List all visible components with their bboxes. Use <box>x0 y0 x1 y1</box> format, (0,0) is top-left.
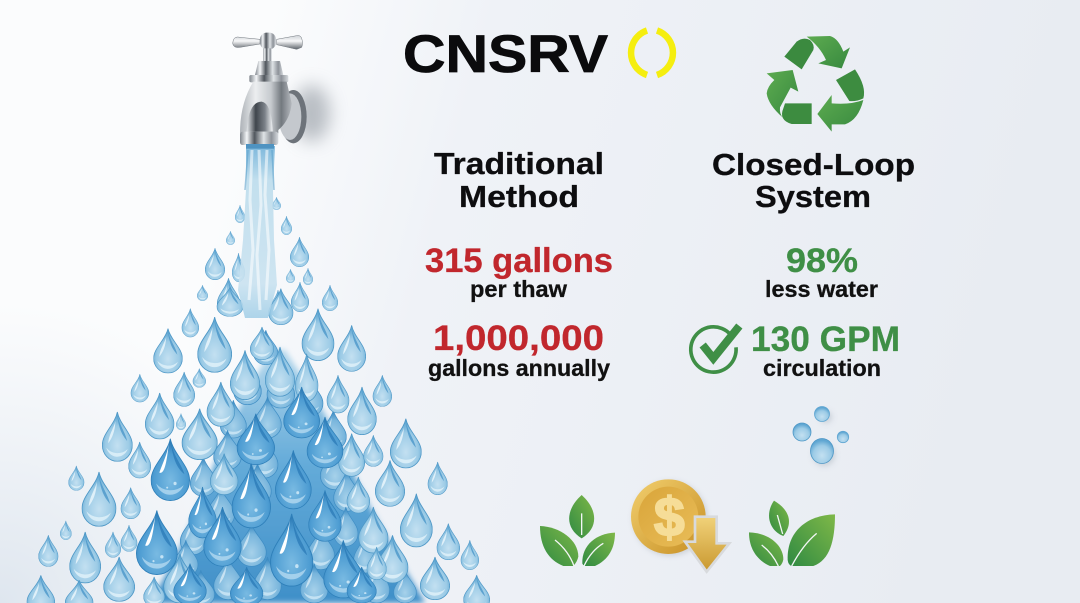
cross handle <box>233 36 302 49</box>
faucet <box>233 33 330 149</box>
icon: check mark <box>691 326 739 372</box>
upper falling drops <box>197 197 338 318</box>
faucet shadow <box>293 85 330 142</box>
icon: coin with down arrow <box>631 479 729 572</box>
icon: recycle <box>767 36 864 132</box>
heading: Closed-Loop System <box>712 147 915 214</box>
stat: 315 gallons per thaw <box>425 242 613 302</box>
stat: 1,000,000 gallons annually <box>428 319 610 381</box>
logo: CNSRV: CNSRV <box>403 25 608 84</box>
stat: 98% less water <box>765 242 878 302</box>
stat: 1,000,000 gallons annually: 1,000,000 <box>433 319 604 358</box>
lower-left and outer drops <box>27 287 490 603</box>
stat: 130 GPM circulation: circulation <box>763 355 881 381</box>
stat: 315 gallons per thaw: per thaw <box>470 276 567 302</box>
stat: 130 GPM circulation: 130 GPM <box>751 320 900 359</box>
heading: Traditional Method: Method <box>459 179 579 214</box>
logo ring <box>631 30 673 75</box>
stat: 130 GPM circulation <box>751 320 900 381</box>
stat: 315 gallons per thaw: 315 gallons <box>425 242 613 280</box>
heading: Traditional Method: Traditional <box>434 146 604 181</box>
wall flange <box>280 90 307 143</box>
heading: Closed-Loop System: System <box>755 179 871 214</box>
heading: Traditional Method <box>434 146 604 214</box>
icon: small water droplets <box>793 406 849 466</box>
icon: left leaves <box>540 495 615 566</box>
water stream <box>238 146 277 318</box>
heading: Closed-Loop System: Closed-Loop <box>712 147 915 182</box>
stat: 1,000,000 gallons annually: gallons annually <box>428 355 610 381</box>
dense mid-blue drop layer <box>174 330 416 603</box>
stat: 98% less water: 98% <box>786 242 858 280</box>
stat: 98% less water: less water <box>765 276 878 302</box>
central dense mass <box>150 350 425 603</box>
water drops pyramid <box>27 197 490 603</box>
icon: coin with down arrow: $ <box>654 486 685 548</box>
icon: right leaves <box>749 501 835 566</box>
